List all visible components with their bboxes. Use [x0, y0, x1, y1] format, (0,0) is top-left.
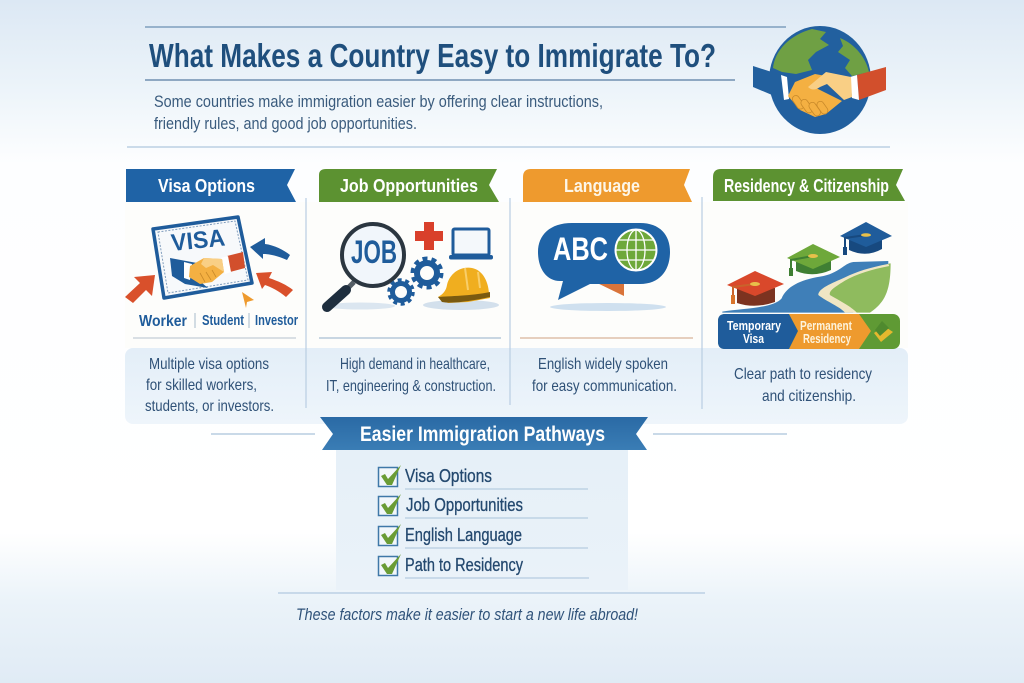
- checklist item: visa options: [378, 465, 588, 489]
- checklist item: job opportunities: [378, 494, 588, 518]
- icon: speech bubble with ABC and globe: ABC: [553, 231, 608, 267]
- text: job description: IT, engineering & construction.: [326, 378, 496, 395]
- side rules: [211, 433, 787, 435]
- pathway bar: Permanent: [800, 319, 853, 333]
- icon: job search, cross, laptop, gears, helmet: JOB: [351, 234, 397, 270]
- panel: easier immigration pathways: [211, 417, 787, 590]
- visa categories: Student: [202, 312, 244, 329]
- checklist background: [336, 450, 628, 590]
- icon: visa card with arrows: [125, 217, 293, 308]
- checklist item: job opportunities: Job Opportunities: [406, 495, 523, 515]
- visa categories: [139, 312, 298, 330]
- text: job description: [326, 356, 496, 395]
- panel: upper card background: [125, 202, 908, 348]
- text: residency description: and citizenship.: [762, 388, 856, 405]
- pathway bar: Temporary: [727, 319, 781, 333]
- text: visa description: Multiple visa options: [149, 356, 269, 373]
- text: language description: [532, 356, 677, 395]
- banner: residency: [713, 169, 905, 201]
- text: language description: English widely spoken: [538, 356, 668, 373]
- panel: lower text band: [125, 348, 908, 424]
- text: residency description: Clear path to residency: [734, 366, 872, 383]
- intro text: friendly rules, and good job opportunities.: [154, 114, 417, 133]
- intro text: [154, 92, 603, 133]
- footer note: These factors make it easier to start a new life abroad!: [296, 605, 638, 624]
- checklist item: english language: [378, 524, 588, 548]
- banner: visa options: [126, 169, 296, 202]
- banner: job opportunities: [319, 169, 499, 202]
- checklist item: path to residency: Path to Residency: [405, 555, 523, 575]
- checklist item: visa options: Visa Options: [405, 466, 492, 486]
- panel: visa options: [125, 169, 298, 415]
- text: residency description: [734, 366, 872, 405]
- text: visa description: for skilled workers,: [146, 377, 257, 394]
- banner: job opportunities: Job Opportunities: [340, 176, 478, 196]
- icon: globe with handshake: [753, 26, 886, 134]
- icon: job search, cross, laptop, gears, helmet: [325, 222, 499, 310]
- banner: visa options: Visa Options: [158, 176, 255, 196]
- icon: speech bubble with ABC and globe: [538, 223, 670, 311]
- checklist item: path to residency: [378, 554, 589, 578]
- footer rule: [278, 592, 705, 594]
- visa categories: Worker: [139, 313, 187, 330]
- panel: language: [523, 169, 692, 395]
- banner: language: Language: [564, 176, 640, 196]
- visa categories: Investor: [255, 312, 298, 329]
- panel: column dividers: [133, 197, 702, 409]
- text: job description: High demand in healthcare,: [340, 356, 490, 373]
- icon: winding road with graduation caps: [722, 222, 892, 313]
- header rules: [127, 27, 890, 147]
- banner: residency: Residency & Citizenship: [724, 176, 889, 196]
- pathway bar: [718, 314, 900, 349]
- panel: job opportunities: [319, 169, 499, 395]
- text: visa description: students, or investors.: [145, 398, 274, 415]
- panel: residency and citizenship: [713, 169, 905, 405]
- pathway bar: Residency: [803, 332, 851, 346]
- pathway bar: Visa: [743, 332, 765, 346]
- icon: visa card with arrows: VISA: [170, 224, 226, 257]
- text: language description: for easy communication.: [532, 378, 677, 395]
- intro text: Some countries make immigration easier by offering clear instructions,: [154, 92, 603, 111]
- banner: pathways heading: Easier Immigration Pathways: [360, 423, 605, 446]
- checklist item: english language: English Language: [405, 525, 522, 545]
- text: visa description: [145, 356, 274, 415]
- title: What Makes a Country Easy to Immigrate To?: [149, 37, 716, 74]
- banner: pathways heading: [320, 417, 648, 450]
- banner: language: [523, 169, 692, 202]
